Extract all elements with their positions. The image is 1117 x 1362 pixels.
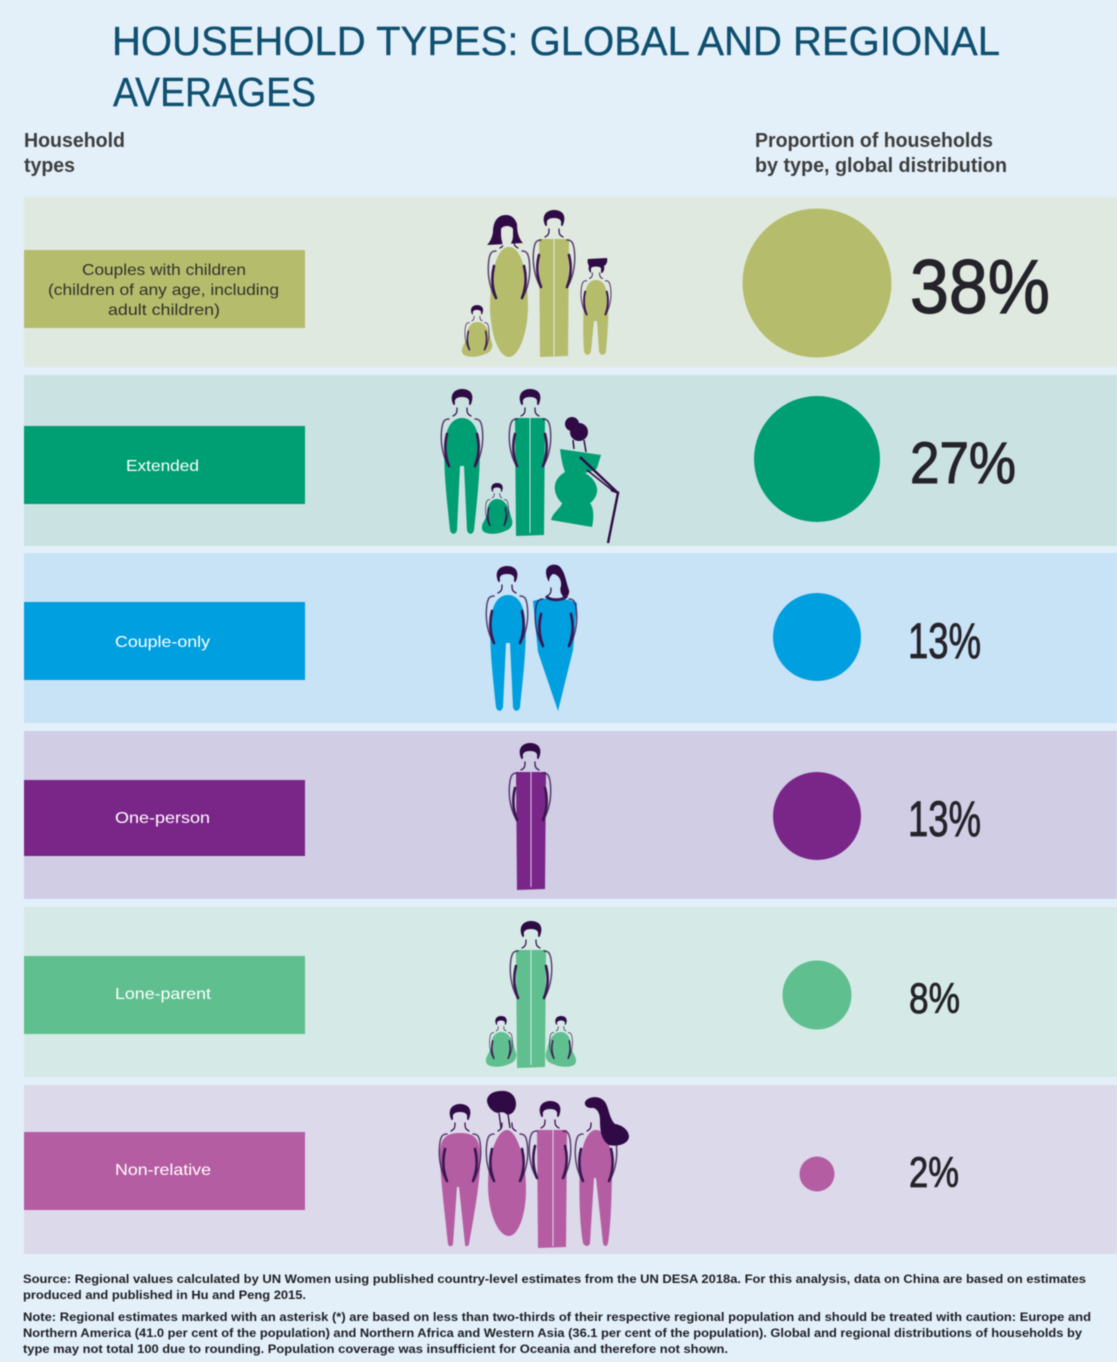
footnote: Note: Regional estimates marked with an asterisk (*) are based on less than two-thirds of their respective regional population and should be treated with caution: Europe and xyxy=(23,1312,1091,1324)
title: HOUSEHOLD TYPES: GLOBAL AND REGIONAL xyxy=(112,18,1000,64)
panel: lone-parent xyxy=(24,907,1117,1077)
source note xyxy=(23,1274,1086,1302)
bubble: 2% xyxy=(800,1156,834,1192)
footnote xyxy=(23,1312,1091,1356)
label: extended: Extended xyxy=(126,458,199,475)
bubble: 38% xyxy=(742,208,892,358)
heading: household types: types xyxy=(24,155,75,177)
label: couples with children: (children of any age, including xyxy=(48,282,279,299)
panel: couple-only xyxy=(24,553,1117,723)
heading: proportion of households: by type, global distribution xyxy=(755,155,1007,177)
heading: proportion of households xyxy=(755,130,1007,177)
bubble: 8% xyxy=(782,960,852,1030)
icon: single person xyxy=(509,743,551,890)
heading: household types xyxy=(24,130,125,177)
label: lone-parent xyxy=(24,956,305,1034)
panel: one-person xyxy=(24,731,1117,899)
label: non-relative xyxy=(24,1132,305,1210)
icon: couple xyxy=(486,565,577,711)
value: 2%: 2% xyxy=(909,1149,959,1197)
footnote: type may not total 100 due to rounding. Population coverage was insufficient for Oceania and therefore not shown. xyxy=(23,1344,728,1356)
label: couples with children: adult children) xyxy=(108,302,220,319)
panel: non-relative xyxy=(24,1085,1117,1254)
value: 38%: 38% xyxy=(910,245,1050,330)
label: couple-only: Couple-only xyxy=(115,634,210,651)
label: couples with children: Couples with children xyxy=(82,262,246,279)
source note: produced and published in Hu and Peng 2015. xyxy=(23,1290,306,1302)
icon: extended family xyxy=(441,389,619,543)
title: AVERAGES xyxy=(113,69,316,115)
source note: Source: Regional values calculated by UN Women using published country-level estimates from the UN DESA 2018a. For this analysis, data on China are based on estimates xyxy=(23,1274,1086,1286)
title xyxy=(112,18,1000,115)
footnote: Northern America (41.0 per cent of the population) and Northern Africa and Western Asia (36.1 per cent of the population). Global and regional distributions of households by xyxy=(23,1328,1083,1340)
value: 13% couple-only: 13% xyxy=(908,613,981,669)
panel: couples with children xyxy=(24,197,1117,367)
label: couple-only xyxy=(24,602,305,680)
panel: extended xyxy=(24,375,1117,546)
label: one-person xyxy=(24,780,305,856)
icon: family of four xyxy=(462,210,611,357)
label: extended xyxy=(24,426,305,504)
icon: lone parent with two children xyxy=(486,921,576,1068)
bubble: 13% couple-only xyxy=(773,593,861,681)
icon: four unrelated people xyxy=(439,1091,629,1248)
value: 8%: 8% xyxy=(909,975,960,1023)
label: lone-parent: Lone-parent xyxy=(115,986,212,1003)
label: one-person: One-person xyxy=(115,810,210,827)
value: 27%: 27% xyxy=(910,431,1016,496)
value: 13% one-person: 13% xyxy=(908,791,981,847)
heading: household types: Household xyxy=(24,130,125,152)
bubble: 27% xyxy=(754,396,880,522)
label: couples with children xyxy=(24,250,305,328)
heading: proportion of households: Proportion of households xyxy=(755,130,993,152)
label: non-relative: Non-relative xyxy=(115,1162,211,1179)
bubble: 13% one-person xyxy=(773,772,861,860)
